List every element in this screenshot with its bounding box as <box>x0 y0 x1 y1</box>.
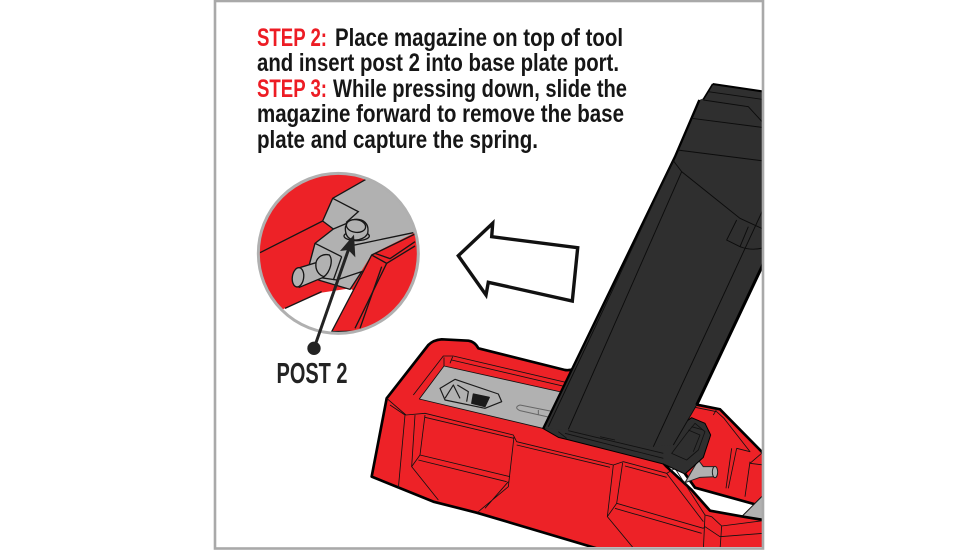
instructions text: plate and capture the spring. <box>257 126 538 154</box>
horizontal post <box>291 255 331 288</box>
inset red wall <box>332 234 423 332</box>
tool and magazine illustration <box>372 84 767 550</box>
instructions text: Place magazine on top of tool <box>335 24 623 52</box>
inset red background <box>260 174 414 310</box>
infographic canvas <box>214 0 764 550</box>
inset gray tool body <box>310 180 414 288</box>
right lower gray post <box>742 496 762 518</box>
frame border <box>215 1 763 548</box>
leader arrow to post 2 <box>307 235 355 355</box>
instructions text: While pressing down, slide the <box>333 75 627 103</box>
side pin <box>685 460 718 483</box>
instructions text: and insert post 2 into base plate port. <box>257 49 619 77</box>
right arm <box>680 403 763 507</box>
instructions text: magazine forward to remove the base <box>257 100 624 128</box>
gray tray <box>419 366 570 430</box>
inset detail circle <box>253 170 427 355</box>
red tool base <box>372 339 763 550</box>
instructions text: STEP 3: <box>257 75 327 103</box>
inset white gap <box>283 289 353 332</box>
tray slot <box>516 404 551 418</box>
post 2 <box>344 218 369 241</box>
inset circle border <box>258 173 418 333</box>
POST 2 label: POST 2 <box>276 358 348 390</box>
logo shield <box>440 379 502 408</box>
instructions text <box>257 24 627 154</box>
instructions text: STEP 2: <box>257 24 327 52</box>
arrow pointing left <box>458 223 578 301</box>
tool edge lines <box>387 356 763 550</box>
magazine base plate <box>543 418 711 474</box>
main red body <box>372 339 763 550</box>
magazine body <box>543 84 767 447</box>
